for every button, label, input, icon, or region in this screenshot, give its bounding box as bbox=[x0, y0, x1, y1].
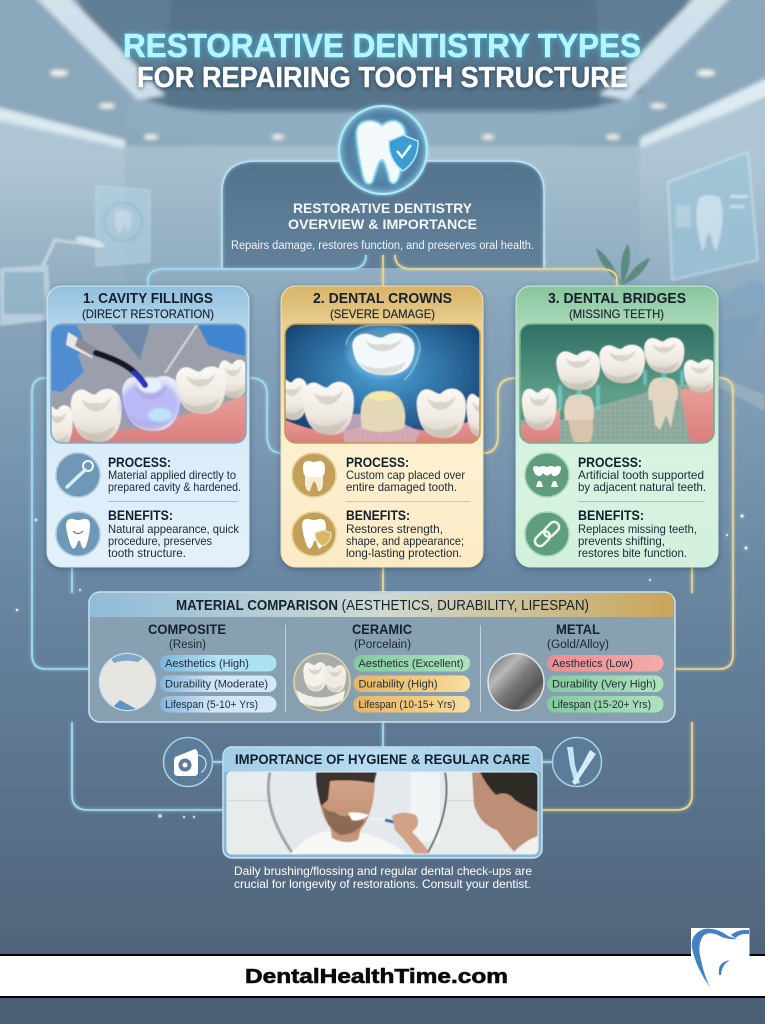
photo: man brushing teeth at mirror bbox=[227, 772, 538, 854]
heading: dental bridges bbox=[548, 290, 686, 321]
footer website: DentalHealthTime.com bbox=[245, 966, 508, 988]
column: ceramic: CERAMIC bbox=[352, 622, 412, 637]
heading: dental bridges: 3. DENTAL BRIDGES bbox=[548, 290, 686, 307]
icon: crowned tooth bbox=[292, 453, 336, 497]
scene: right wall screen with tooth bbox=[668, 152, 758, 280]
column: ceramic bbox=[294, 622, 470, 712]
column: ceramic: Durability (High) bbox=[358, 678, 438, 690]
heading: cavity fillings: 1. CAVITY FILLINGS bbox=[83, 290, 213, 307]
connector lines: blue network bbox=[32, 255, 553, 810]
column: metal: Aesthetics (Low) bbox=[552, 658, 633, 670]
text: process: prepared cavity & hardened. bbox=[108, 480, 241, 494]
column: metal: Lifespan (15-20+ Yrs) bbox=[552, 699, 651, 711]
text: hygiene note: Daily brushing/flossing and regular dental check-ups are bbox=[234, 864, 532, 878]
column: composite: (Resin) bbox=[169, 639, 206, 651]
column: metal bbox=[488, 622, 664, 712]
logo: blue tooth outline bbox=[691, 928, 750, 987]
column: composite: COMPOSITE bbox=[148, 622, 226, 637]
icon: smiling tooth bbox=[56, 512, 100, 556]
connector lines: gold network bbox=[383, 255, 733, 810]
text: benefits: BENEFITS: bbox=[108, 507, 173, 523]
scene: left wall screen bbox=[96, 186, 150, 266]
column: metal: (Gold/Alloy) bbox=[547, 639, 609, 651]
text: process bbox=[578, 454, 706, 494]
column: metal: Durability (Very High) bbox=[552, 678, 656, 690]
text: process bbox=[346, 454, 465, 494]
illustration: bridge over abutment teeth bbox=[520, 324, 717, 443]
overview text: Repairs damage, restores function, and preserves oral health. bbox=[231, 240, 534, 252]
text: benefits: procedure, preserves bbox=[108, 534, 212, 548]
scene: plant bbox=[596, 244, 650, 285]
panel: hygiene and regular care bbox=[223, 747, 542, 858]
text: benefits: tooth structure. bbox=[108, 546, 186, 560]
title: FOR REPAIRING TOOTH STRUCTURE bbox=[137, 62, 628, 94]
text: benefits bbox=[578, 507, 697, 560]
icon: toothbrushes bbox=[552, 738, 602, 786]
text: process: Custom cap placed over bbox=[346, 468, 465, 482]
text: benefits: Natural appearance, quick bbox=[108, 522, 240, 536]
heading: dental bridges: (MISSING TEETH) bbox=[569, 307, 664, 321]
icon: dental floss bbox=[164, 738, 212, 786]
illustration: light curing a filling bbox=[44, 324, 248, 447]
header band: MATERIAL COMPARISON (AESTHETICS, DURABILITY, LIFESPAN) bbox=[176, 598, 589, 614]
title: RESTORATIVE DENTISTRY TYPES bbox=[123, 27, 641, 64]
header band bbox=[90, 593, 674, 617]
column: ceramic: Aesthetics (Excellent) bbox=[358, 658, 464, 670]
panel: dental bridges bbox=[516, 286, 718, 567]
title bbox=[123, 27, 641, 94]
overview heading: OVERVIEW & IMPORTANCE bbox=[288, 216, 477, 232]
panel: cavity fillings bbox=[44, 286, 249, 567]
column: metal: METAL bbox=[556, 622, 600, 637]
text: process: PROCESS: bbox=[346, 454, 409, 470]
text: benefits: BENEFITS: bbox=[346, 507, 410, 523]
text: process bbox=[108, 454, 241, 494]
scene: dental chair bbox=[716, 280, 765, 412]
icon: chain link bbox=[525, 512, 569, 556]
text: benefits bbox=[346, 507, 464, 560]
column: composite: Lifespan (5-10+ Yrs) bbox=[165, 699, 258, 711]
column: ceramic: Lifespan (10-15+ Yrs) bbox=[358, 699, 456, 711]
icon: bridge bbox=[525, 453, 569, 497]
text: benefits: Replaces missing teeth, bbox=[578, 522, 697, 536]
text: benefits: restores bite function. bbox=[578, 546, 687, 560]
heading: dental crowns: 2. DENTAL CROWNS bbox=[313, 290, 452, 307]
heading: dental crowns bbox=[313, 290, 452, 321]
icon: dental mirror bbox=[56, 453, 100, 497]
text: hygiene note bbox=[234, 864, 532, 891]
swatch: porcelain bbox=[294, 654, 350, 710]
swatch: composite resin bbox=[100, 654, 156, 712]
footer band bbox=[0, 954, 765, 998]
text: benefits: prevents shifting, bbox=[578, 534, 665, 548]
sparkles bbox=[16, 254, 748, 818]
icon: glowing tooth with shield bbox=[339, 106, 427, 194]
text: process: Artificial tooth supported bbox=[578, 468, 704, 482]
column: composite: Aesthetics (High) bbox=[165, 658, 249, 670]
heading: dental crowns: (SEVERE DAMAGE) bbox=[330, 307, 435, 321]
column: ceramic: (Porcelain) bbox=[354, 639, 411, 651]
column: composite: Durability (Moderate) bbox=[165, 678, 268, 690]
illustration: crown over prepared tooth bbox=[286, 324, 480, 442]
overview heading: RESTORATIVE DENTISTRY bbox=[293, 200, 473, 216]
heading: cavity fillings: (DIRECT RESTORATION) bbox=[82, 307, 214, 321]
text: benefits: BENEFITS: bbox=[578, 507, 644, 523]
panel: material comparison bbox=[89, 592, 675, 722]
text: benefits: long-lasting protection. bbox=[346, 546, 462, 560]
text: process: PROCESS: bbox=[108, 454, 171, 470]
text: benefits bbox=[108, 507, 240, 560]
overview heading bbox=[288, 200, 477, 232]
icon: tooth with shield bbox=[292, 512, 336, 556]
heading: hygiene: IMPORTANCE OF HYGIENE & REGULAR CARE bbox=[235, 752, 530, 767]
panel: overview bbox=[222, 161, 544, 268]
heading: cavity fillings bbox=[82, 290, 214, 321]
text: benefits: shape, and appearance; bbox=[346, 534, 464, 548]
scene: lamp and monitor bbox=[0, 234, 106, 326]
text: hygiene note: crucial for longevity of restorations. Consult your dentist. bbox=[234, 877, 531, 891]
column: composite bbox=[100, 622, 276, 712]
text: benefits: Restores strength, bbox=[346, 522, 443, 536]
text: process: Material applied directly to bbox=[108, 468, 236, 482]
text: process: by adjacent natural teeth. bbox=[578, 480, 706, 494]
text: process: entire damaged tooth. bbox=[346, 480, 457, 494]
swatch: brushed metal bbox=[488, 654, 544, 710]
text: process: PROCESS: bbox=[578, 454, 642, 470]
panel: dental crowns bbox=[277, 286, 494, 567]
